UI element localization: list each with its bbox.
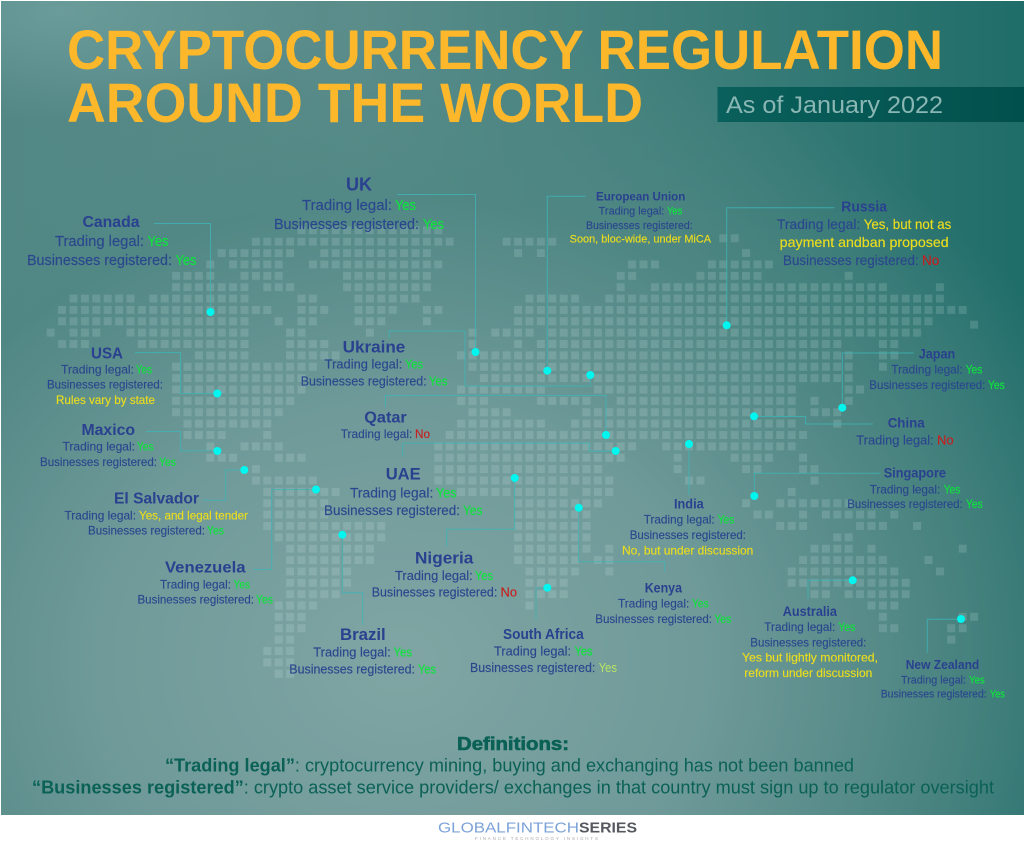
country: El Salvador: Yes — [207, 524, 224, 538]
country: UAE: Trading legal: — [350, 485, 433, 500]
country: Kenya: Trading legal: — [618, 597, 689, 611]
country: European Union: European Union — [596, 192, 685, 204]
country: New Zealand: New Zealand — [906, 658, 979, 672]
country: New Zealand: Trading legal: — [901, 674, 966, 686]
country: Canada: Yes — [148, 234, 168, 250]
country: South Africa: Trading legal: — [494, 643, 571, 658]
country: UAE: UAE — [386, 464, 421, 483]
country: India: Trading legal: — [644, 513, 715, 527]
country: Russia — [723, 199, 951, 329]
logo: GLOBALFINTECH — [438, 820, 579, 836]
country: USA: Businesses registered: — [47, 378, 163, 392]
country: India — [622, 440, 753, 557]
country: USA — [47, 345, 221, 407]
country: UK: Yes — [423, 217, 444, 233]
country: Singapore: Yes — [944, 482, 960, 496]
country: Canada: Yes — [176, 253, 196, 269]
country: Nigeria — [372, 474, 519, 600]
country: Mexico: Maxico — [82, 422, 135, 439]
country: Venezuela: Venezuela — [165, 560, 246, 577]
country: New Zealand: Yes — [990, 688, 1005, 700]
country: Nigeria: Businesses registered: — [372, 585, 497, 600]
country: Russia: Russia — [841, 199, 888, 215]
country: South Africa: South Africa — [503, 627, 585, 643]
country: Japan: Yes — [988, 378, 1005, 392]
country: Australia — [742, 576, 878, 680]
logo — [438, 820, 637, 841]
country: Venezuela: Trading legal: — [160, 577, 231, 591]
date banner: As of January 2022 — [726, 92, 943, 119]
country: Mexico: Trading legal: — [62, 440, 135, 454]
country: Singapore: Trading legal: — [870, 482, 940, 496]
country: Mexico — [40, 422, 221, 469]
country: European Union: Soon, bloc-wide, under MiCA — [570, 234, 712, 246]
dotted world map — [47, 230, 981, 674]
country: European Union: Yes — [667, 206, 683, 218]
country: Russia: Businesses registered: — [783, 253, 919, 268]
country: El Salvador — [64, 466, 248, 538]
country: Japan: Yes — [966, 362, 982, 376]
country: Australia: Businesses registered: — [750, 636, 866, 650]
country: Qatar: Qatar — [364, 409, 407, 426]
country: Russia: Yes, but not as — [864, 217, 951, 232]
country: India: Yes — [718, 513, 734, 527]
definitions: Definitions: — [457, 734, 569, 754]
country: Russia: No — [922, 253, 939, 268]
title: CRYPTOCURRENCY REGULATION — [67, 18, 943, 81]
country: Kenya: Kenya — [645, 579, 682, 595]
country: UAE: Yes — [436, 485, 457, 500]
country: European Union: Businesses registered: — [586, 220, 693, 232]
country: UK: Businesses registered: — [274, 217, 419, 233]
country: UAE — [324, 443, 620, 518]
country: South Africa: Yes — [599, 660, 617, 675]
title: AROUND THE WORLD — [67, 71, 643, 134]
country: Venezuela: Yes — [234, 577, 250, 591]
country: Japan — [838, 346, 1005, 412]
country: Canada: Trading legal: — [55, 234, 144, 250]
country: Singapore: Businesses registered: — [847, 497, 963, 511]
country: El Salvador: Yes, and legal tender — [139, 508, 248, 522]
country: India: No, but under discussion — [622, 543, 753, 557]
country: Venezuela: Yes — [256, 593, 273, 607]
country: Brazil: Trading legal: — [313, 645, 391, 660]
country: UK — [274, 175, 480, 356]
country: Nigeria: Nigeria — [415, 549, 474, 567]
country: Nigeria: Yes — [475, 568, 493, 583]
country: Canada: Canada — [82, 214, 140, 231]
country: Mexico: Businesses registered: — [40, 455, 157, 469]
country: Ukraine: Yes — [429, 373, 448, 388]
country: Australia: Yes but lightly monitored, — [742, 651, 878, 665]
country: Kenya: Yes — [692, 597, 709, 611]
logo: FINANCE TECHNOLOGY INSIGHTS — [475, 836, 598, 841]
country: India: India — [674, 496, 704, 511]
country: El Salvador: Businesses registered: — [88, 524, 205, 538]
country: Ukraine: Businesses registered: — [301, 373, 427, 388]
country: South Africa — [470, 584, 617, 675]
country: Brazil: Yes — [418, 661, 436, 676]
country: Ukraine: Ukraine — [343, 337, 405, 356]
country: South Africa: Yes — [574, 643, 592, 658]
country: South Africa: Businesses registered: — [470, 660, 595, 675]
definitions: “Trading legal”: cryptocurrency mining, buying and exchanging has not been banned — [165, 756, 854, 776]
country: Japan: Japan — [919, 346, 955, 361]
country: El Salvador: El Salvador — [114, 490, 199, 507]
country: Singapore: Yes — [966, 497, 983, 511]
country: New Zealand: Businesses registered: — [881, 688, 987, 700]
country: UK: Trading legal: — [302, 198, 392, 214]
country: Ukraine: Trading legal: — [325, 357, 402, 372]
country: Russia: Trading legal: — [777, 217, 860, 232]
title — [67, 18, 943, 134]
date banner — [718, 87, 1024, 122]
country: Qatar: Trading legal: — [341, 427, 412, 441]
country: El Salvador: Trading legal: — [64, 508, 136, 522]
country: Australia: Australia — [783, 604, 837, 619]
country: Singapore: Singapore — [884, 466, 946, 481]
definitions: “Businesses registered”: crypto asset service providers/ exchanges in that country must sign up to regulator oversight — [32, 777, 994, 797]
logo: SERIES — [579, 820, 637, 836]
country: Nigeria: Trading legal: — [395, 568, 473, 583]
country: Ukraine: Yes — [405, 357, 423, 372]
country: China: China — [888, 415, 925, 431]
country: China: Trading legal: — [856, 432, 934, 447]
country: European Union — [543, 192, 712, 375]
country: European Union: Trading legal: — [599, 206, 664, 218]
country: Singapore — [750, 466, 983, 511]
country: Australia: reform under discussion — [744, 666, 872, 680]
country: Japan: Businesses registered: — [869, 378, 985, 392]
country: USA: Rules vary by state — [56, 393, 155, 407]
country: Nigeria: No — [500, 585, 517, 600]
country: China — [750, 412, 954, 447]
country: Kenya: Businesses registered: — [595, 612, 712, 626]
country: USA: Yes — [136, 362, 152, 376]
country: UK: Yes — [395, 198, 416, 214]
country: Australia: Yes — [838, 620, 855, 634]
country: Qatar — [341, 396, 610, 441]
country: Brazil: Businesses registered: — [289, 661, 415, 676]
country: UAE: Yes — [463, 503, 483, 518]
country: UK: UK — [346, 175, 372, 195]
country: Ukraine — [301, 331, 594, 388]
country: Canada — [27, 214, 214, 316]
country: Australia: Trading legal: — [764, 620, 835, 634]
country: UAE: Businesses registered: — [324, 503, 460, 518]
country: China: No — [937, 432, 954, 447]
country: Venezuela — [138, 486, 320, 607]
country: USA: USA — [91, 345, 123, 362]
country: Mexico: Yes — [159, 455, 176, 469]
country: Brazil: Brazil — [340, 626, 386, 644]
country: Mexico: Yes — [137, 440, 154, 454]
country: Kenya — [575, 504, 731, 626]
country: Brazil — [289, 531, 436, 676]
country: New Zealand: Yes — [969, 674, 985, 686]
country: India: Businesses registered: — [630, 528, 746, 542]
country: New Zealand — [881, 615, 1005, 700]
country: USA: Trading legal: — [61, 362, 134, 376]
country: Kenya: Yes — [714, 612, 731, 626]
country: Venezuela: Businesses registered: — [138, 593, 254, 607]
country: Brazil: Yes — [394, 645, 412, 660]
country: Qatar: No — [415, 427, 430, 441]
country: Canada: Businesses registered: — [27, 253, 172, 269]
definitions — [32, 734, 994, 797]
country: Japan: Trading legal: — [891, 362, 963, 376]
country: Russia: payment andban proposed — [780, 235, 949, 250]
